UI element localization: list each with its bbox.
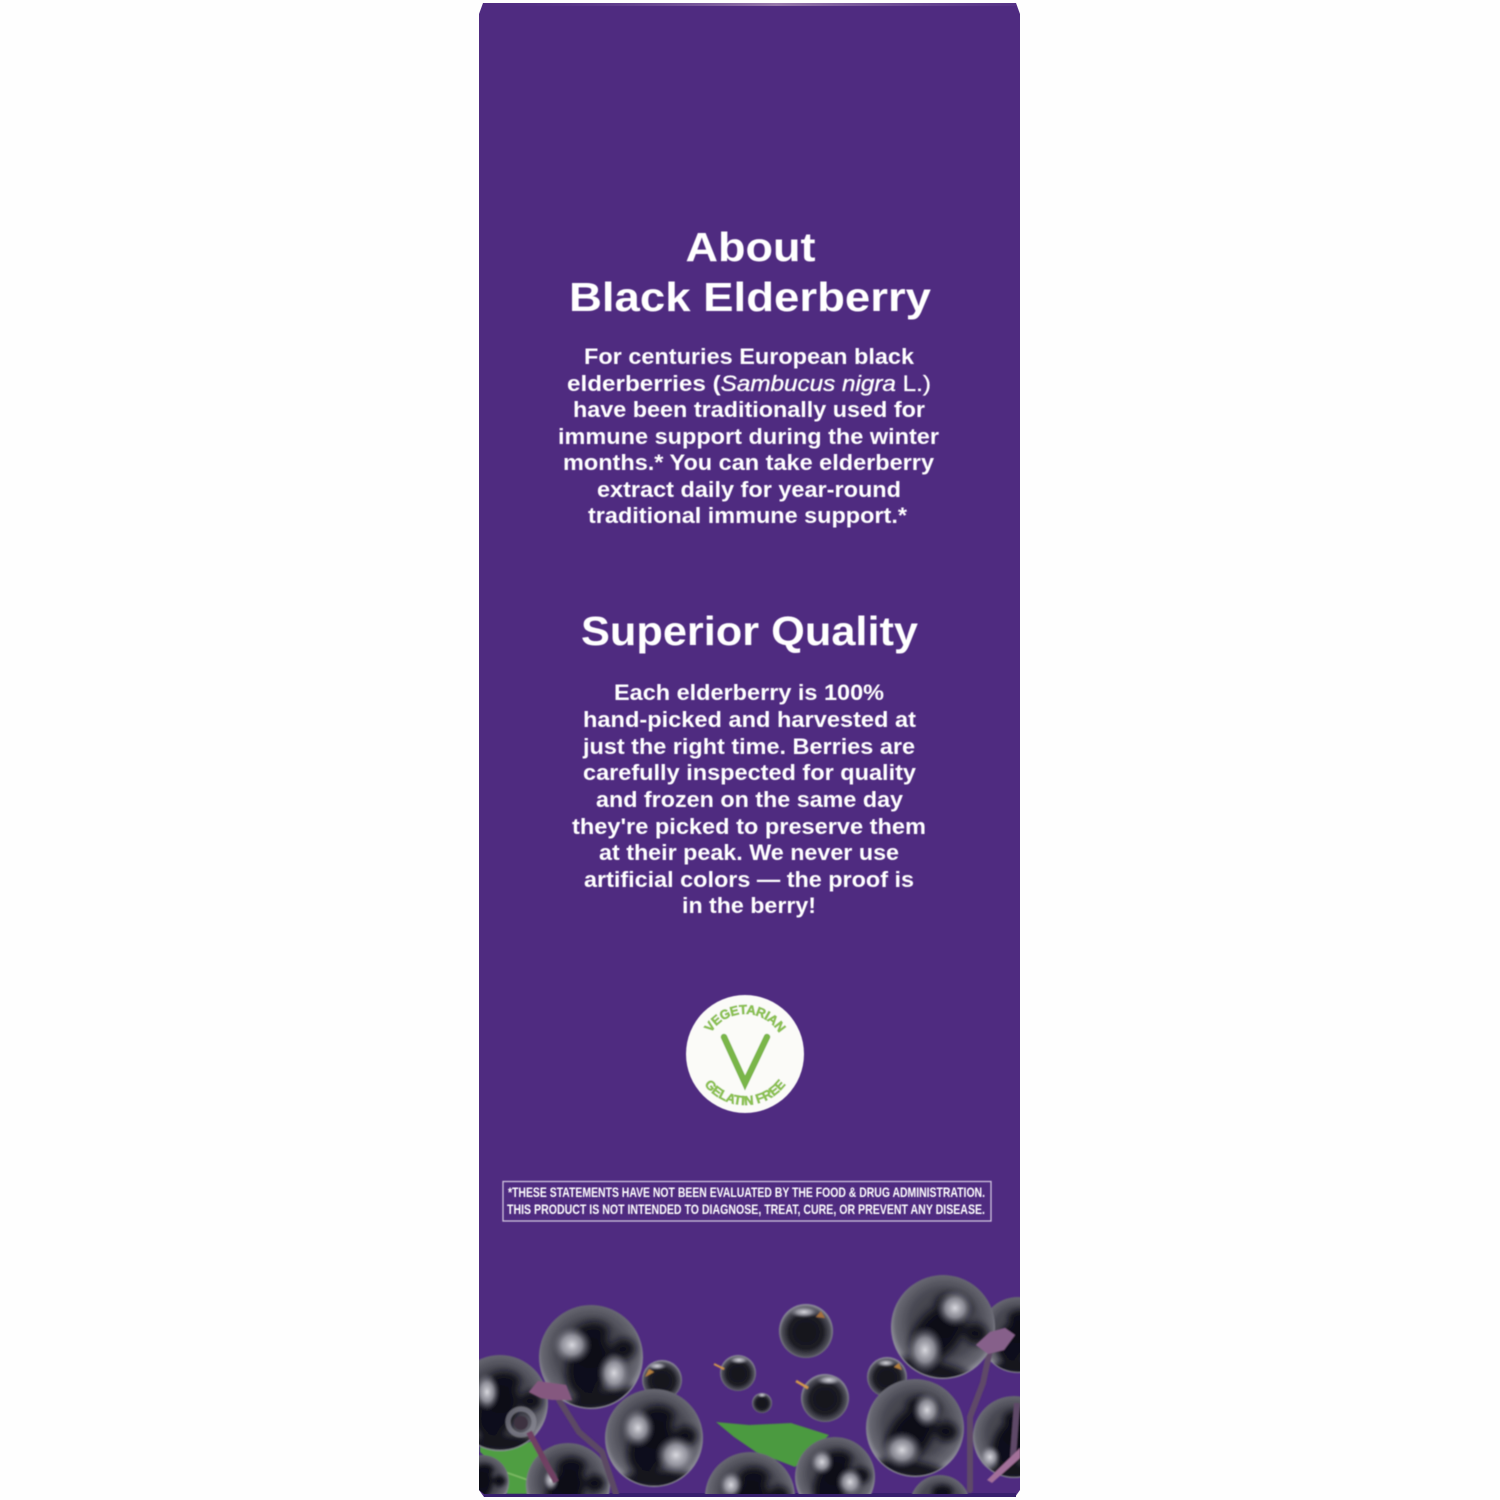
- text block: about paragraph: For centuries European black: [584, 344, 915, 369]
- berries: back row: [479, 1296, 1020, 1494]
- text block: quality paragraph: Each elderberry is 100%: [614, 680, 884, 705]
- text block: about paragraph: [558, 344, 939, 528]
- text block: quality paragraph: hand-picked and harvested at: [583, 707, 917, 732]
- stems: [559, 1350, 990, 1494]
- text block: quality paragraph: carefully inspected for quality: [583, 760, 917, 785]
- icon: vegetarian gelatin free badge: GELATIN FREE: [705, 1078, 786, 1106]
- berries: front row: [452, 1263, 1007, 1500]
- text block: about paragraph: traditional immune support.*: [588, 503, 907, 528]
- icon: vegetarian gelatin free badge: VEGETARIAN: [702, 1004, 787, 1034]
- text block: quality paragraph: just the right time. Berries are: [582, 734, 915, 759]
- heading: About Black Elderberry: Black Elderberry: [569, 274, 931, 320]
- illustration: elderberries and leaves: [479, 1274, 1020, 1494]
- leaf: left: [480, 1440, 542, 1494]
- text block: about paragraph: immune support during the winter: [558, 424, 939, 449]
- callout: FDA disclaimer box: [503, 1182, 991, 1221]
- leaf: center: [716, 1422, 829, 1467]
- heading: Superior Quality: Superior Quality: [581, 608, 918, 654]
- text block: quality paragraph: [572, 680, 926, 918]
- stems: calyx and pink stalks: [529, 1328, 1020, 1483]
- callout: FDA disclaimer box: THIS PRODUCT IS NOT INTENDED TO DIAGNOSE, TREAT, CURE, OR PREVENT ANY DISEASE.: [507, 1201, 985, 1217]
- text block: about paragraph: have been traditionally used for: [573, 397, 925, 422]
- berries: floating small: [714, 1304, 849, 1422]
- callout: FDA disclaimer box: *THESE STATEMENTS HAVE NOT BEEN EVALUATED BY THE FOOD & DRUG ADMINISTRATION.: [508, 1184, 985, 1200]
- heading: About Black Elderberry: About: [686, 224, 816, 270]
- text block: quality paragraph: and frozen on the same day: [596, 787, 904, 812]
- text block: quality paragraph: at their peak. We never use: [599, 840, 899, 865]
- text block: about paragraph: extract daily for year-round: [597, 477, 901, 502]
- text block: quality paragraph: artificial colors — the proof is: [584, 867, 914, 892]
- heading: About Black Elderberry: [569, 224, 931, 320]
- panel: purple box: [479, 3, 1020, 1497]
- text block: quality paragraph: they're picked to preserve them: [572, 814, 926, 839]
- text block: about paragraph: elderberries ( Sambucus nigra L.): [567, 371, 931, 396]
- text block: quality paragraph: in the berry!: [682, 893, 816, 918]
- text block: about paragraph: months.* You can take elderberry: [563, 450, 935, 475]
- icon: vegetarian gelatin free badge: [685, 994, 805, 1114]
